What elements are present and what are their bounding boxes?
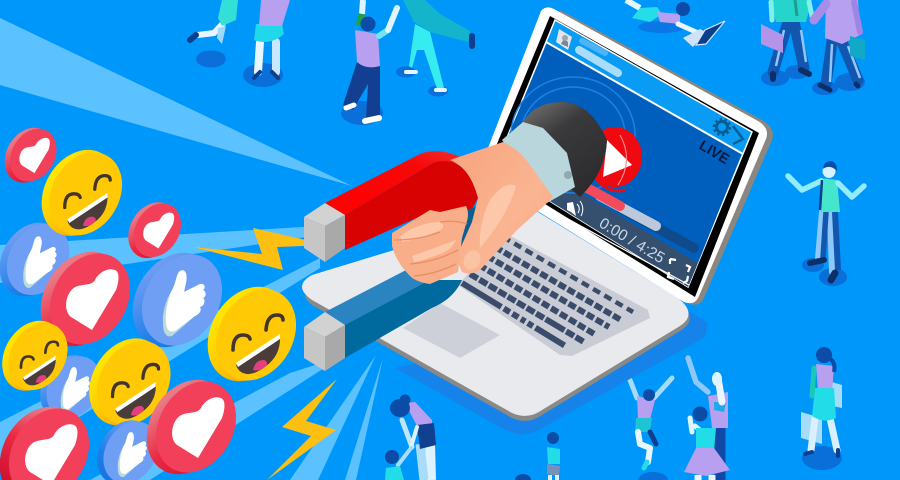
person: handstand figure [396,0,472,96]
person: seated head bottom [515,474,531,480]
laptop base [302,210,689,416]
blue arm side [345,280,462,358]
LIVE label: LIVE [696,138,732,168]
person: woman in skirt top [243,0,290,87]
reaction: thumb 4 [97,420,158,480]
reaction: big laughing emoji [191,272,312,396]
avatar [556,29,572,50]
finger creases [394,221,467,276]
header line [546,42,743,154]
fullscreen icon [668,259,690,283]
reaction: heart bottom left [0,407,89,480]
palm [450,142,553,274]
palm highlight [480,185,516,248]
progress track [620,208,694,248]
person: businessman with purple bag [761,0,812,86]
reaction: laughing emoji 4 [74,325,185,439]
lightning bolt lower [267,379,337,480]
finger highlights [400,222,456,262]
laptop [302,7,773,435]
person: woman bending bottom [390,394,436,480]
keyboard keys [462,237,633,350]
black bezel [487,16,759,297]
video area [495,43,742,263]
red pole grey cap [304,203,345,262]
blue arm top [325,268,432,325]
thumb nail [461,248,483,272]
light rays from the magnet [0,18,383,480]
cuff [502,122,575,203]
person: businessman with teal bag [812,0,865,95]
screen [495,20,752,287]
person: jumping figure top left [190,0,238,68]
reaction: thumb 3 [29,345,112,430]
progress played [580,184,620,206]
reaction: heart bottom [130,365,252,480]
person: man with purple shirt [341,0,397,125]
horseshoe magnet [304,151,480,371]
header bars [579,41,618,73]
reaction: small heart 2 [118,193,190,267]
trackpad [403,303,500,358]
timecode: 0:00 / 4:25 [596,215,667,267]
blue pole grey cap [304,312,345,371]
fist [392,206,468,284]
person: jumping figure bottom [630,378,672,480]
person: child standing [547,432,560,480]
speaker icon [567,201,583,216]
person: woman in purple skirt [684,406,730,480]
person: woman lying with laptop [626,0,725,47]
keyboard well [458,233,650,356]
red arm side [345,161,478,250]
lid back edge [500,10,773,305]
cuff button [564,171,572,179]
video rings [511,77,635,193]
reaction: laughing emoji 3 [0,310,79,402]
reaction: thumb [0,211,82,308]
play button [588,127,642,191]
lightning bolt upper [193,228,328,270]
person: child bending [385,450,404,480]
blue inner magnet [452,205,480,262]
laptop base edge [305,215,690,421]
sleeve [523,102,607,197]
reaction: big thumb [116,238,238,362]
control bar line [546,207,689,285]
person: presenting man right [788,161,864,286]
red arm top [325,151,472,215]
hand gripping magnet [392,102,607,284]
person: woman reaching up [688,358,728,480]
reaction: small heart [0,119,66,191]
person: woman with shopping bags [801,347,842,470]
next arrow icon [733,126,743,144]
control bar [495,144,698,287]
lid frame [478,7,767,303]
progress buffered [600,196,656,226]
reaction: laughing emoji [27,136,137,250]
gear icon [714,119,730,135]
reaction: big heart [24,237,146,361]
laptop shadow [395,305,708,435]
